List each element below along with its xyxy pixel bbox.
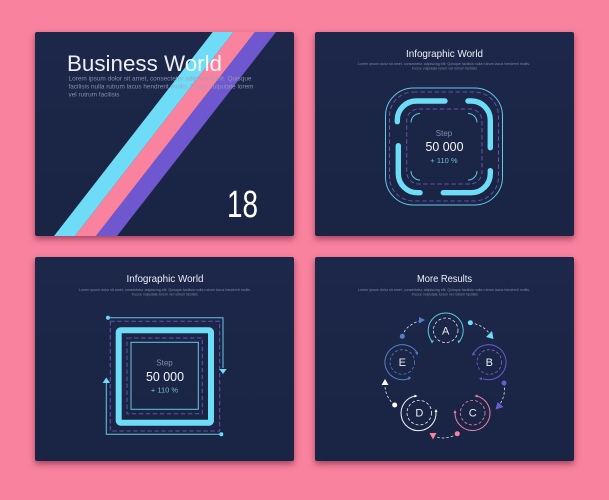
cycle node D	[401, 394, 438, 431]
diagonal stripes	[54, 32, 276, 236]
panel: square infographic	[35, 257, 294, 464]
cover text: vel rutrum facilisis	[68, 92, 120, 98]
description: Fusce vulputate lorem vel rutrum facilisis	[412, 292, 478, 296]
step value: 50 000	[426, 140, 464, 154]
page number: 18	[227, 184, 258, 226]
cycle node E: E	[399, 357, 406, 369]
description	[358, 288, 530, 296]
panel: rounded square infographic	[315, 32, 574, 239]
arrow: C to D	[430, 431, 460, 440]
cycle node C: C	[469, 408, 477, 420]
arrow: D to E	[382, 379, 397, 408]
heading: Infographic World	[406, 49, 483, 60]
arrow: E to A	[400, 317, 425, 339]
step value: + 110 %	[151, 386, 178, 394]
description: Lorem ipsum dolor sit amet, consectetur adipiscing elit. Quisque facilisis nulla rutrum lacus hendrerit mollis.	[358, 62, 530, 66]
step value: 50 000	[146, 370, 184, 384]
arrow: B to C	[496, 380, 506, 410]
square diagram	[103, 316, 227, 436]
panel: more results	[315, 257, 574, 464]
cycle node B	[472, 345, 506, 380]
arrow: bottom left	[103, 378, 223, 436]
cycle node A	[428, 313, 463, 344]
cover text	[68, 76, 254, 98]
cycle node D: D	[415, 408, 423, 420]
cover text: Lorem ipsum dolor sit amet, consectetur adipiscing elit. Quisque	[68, 76, 252, 82]
step value	[426, 129, 464, 165]
step value: Step	[436, 129, 453, 138]
step value: Step	[156, 358, 173, 368]
description: Fusce vulputate lorem vel rutrum facilisis	[132, 292, 198, 296]
description: Lorem ipsum dolor sit amet, consectetur adipiscing elit. Quisque facilisis nulla rutrum lacus hendrerit mollis.	[358, 288, 530, 292]
cover title: Business World	[67, 51, 222, 76]
panel: cover	[35, 32, 294, 239]
cycle node A: A	[442, 326, 450, 338]
step value: + 110 %	[430, 156, 458, 165]
description	[79, 288, 251, 296]
cover text: facilisis nulla rutrum lacus hendrerit mollis. Fusce vulputate lorem	[68, 84, 254, 90]
cycle node C	[454, 394, 490, 430]
arrow: A to B	[468, 320, 494, 339]
rounded square diagram	[386, 88, 502, 205]
cycle node B: B	[486, 357, 493, 369]
arrow: top right	[106, 316, 227, 374]
heading: More Results	[417, 274, 472, 285]
description: Fusce vulputate lorem vel rutrum facilisis	[412, 66, 477, 70]
heading: Infographic World	[126, 274, 204, 285]
description	[358, 62, 530, 70]
description: Lorem ipsum dolor sit amet, consectetur adipiscing elit. Quisque facilisis nulla rutrum lacus hendrerit mollis.	[79, 288, 251, 292]
cycle node E	[385, 345, 418, 380]
step value	[146, 358, 184, 394]
